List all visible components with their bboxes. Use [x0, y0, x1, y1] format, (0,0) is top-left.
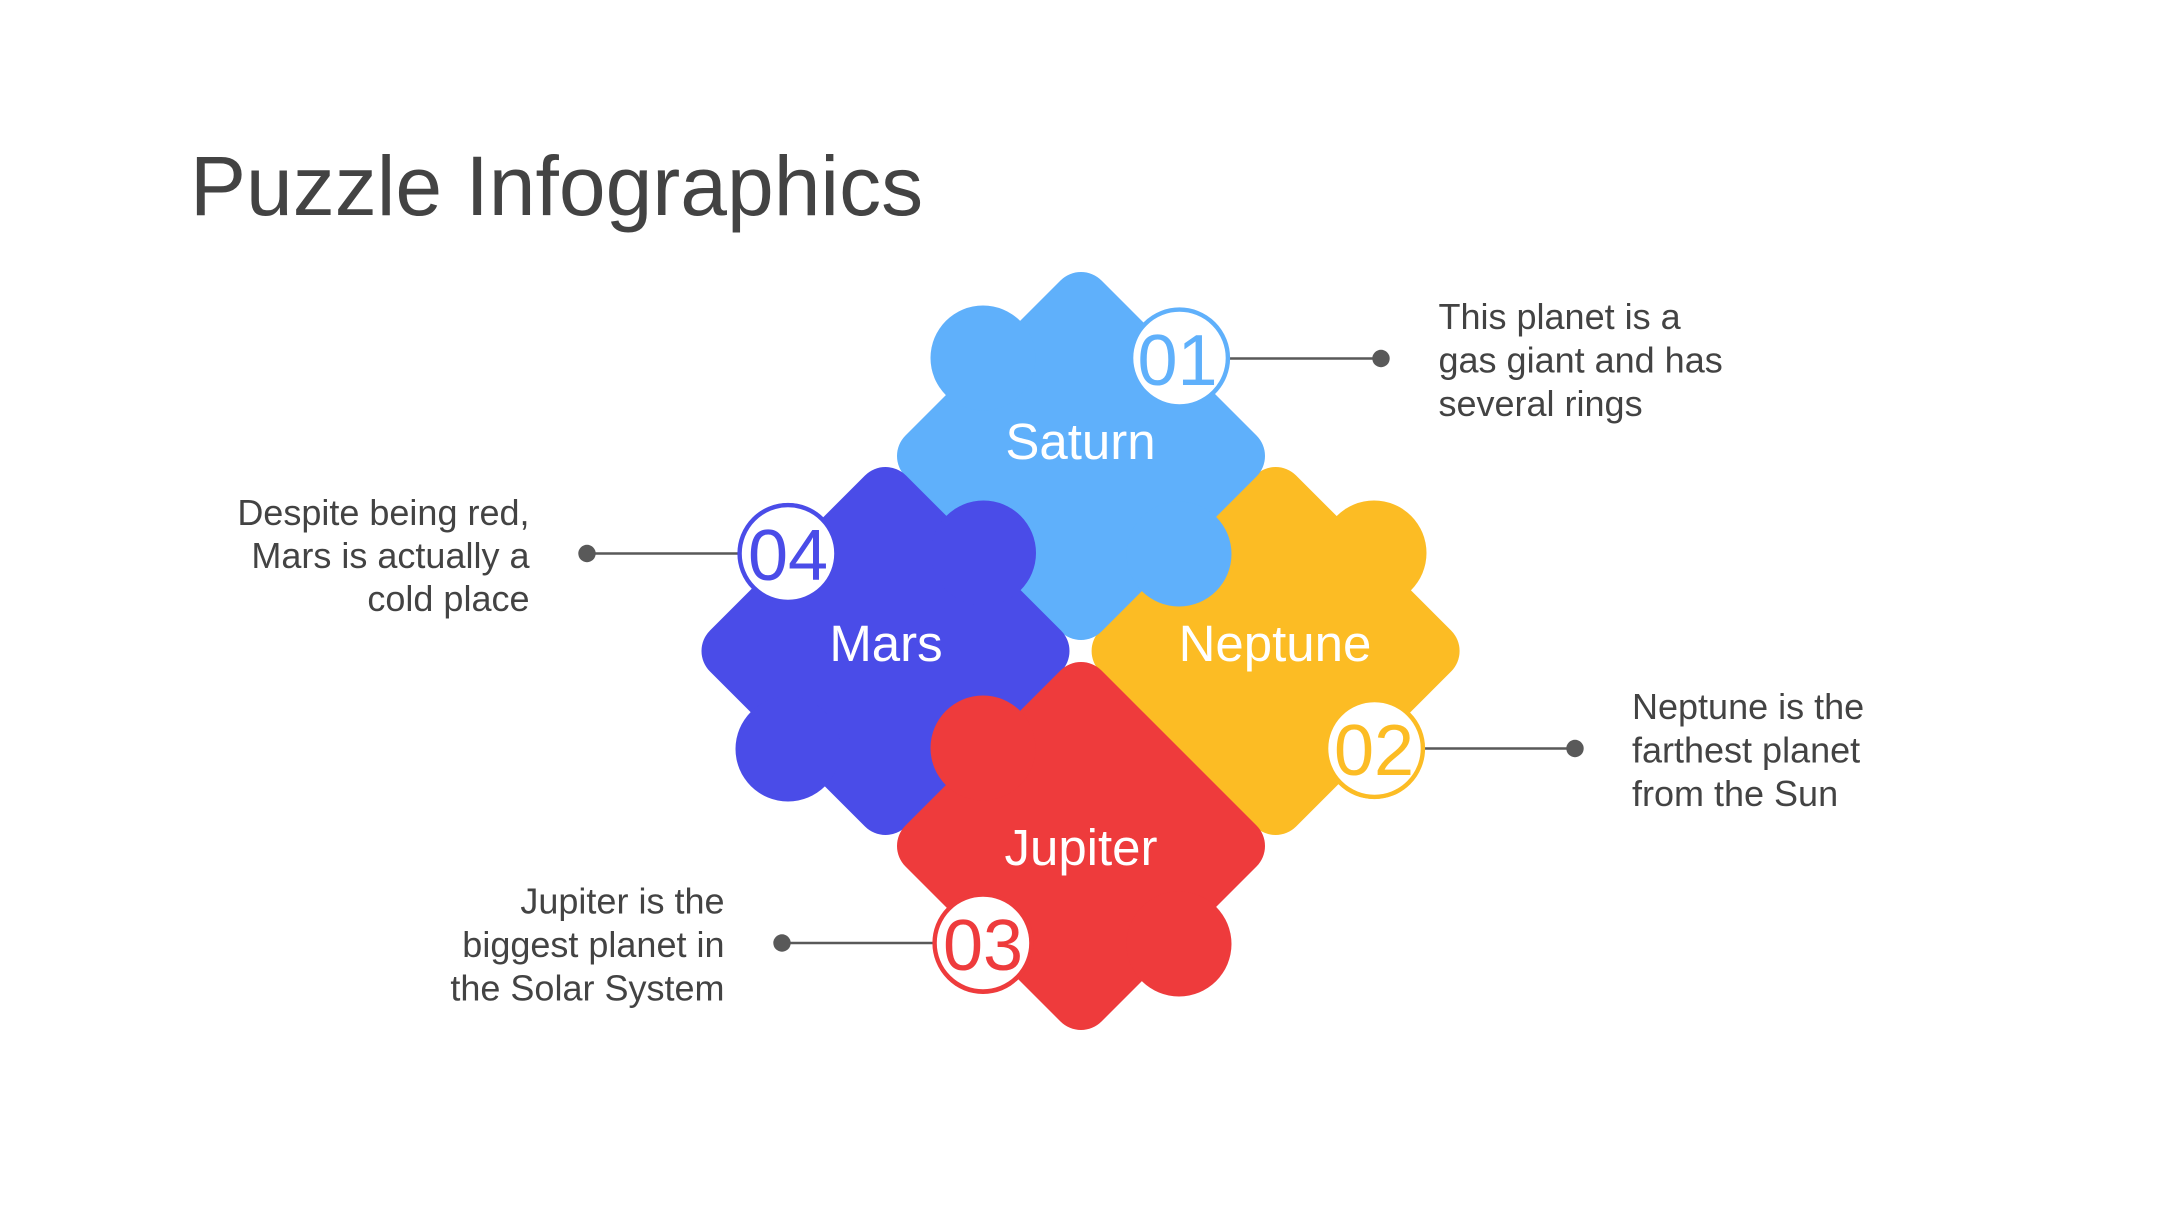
- text block: Mars description: Mars is actually a: [251, 535, 530, 576]
- label: Jupiter: Jupiter: [1004, 819, 1158, 876]
- badge: 03: 03: [943, 906, 1023, 986]
- puzzle piece: Mars: [689, 455, 1082, 847]
- label: Mars: Mars: [829, 615, 943, 672]
- callout connector: 02: [1420, 740, 1584, 757]
- text block: Mars description: Despite being red,: [237, 492, 530, 533]
- badge: 02: 02: [1334, 711, 1414, 791]
- text block: Neptune description: Neptune is the: [1632, 686, 1864, 727]
- callout connector: 01: [1226, 350, 1390, 367]
- label: Saturn: Saturn: [1005, 413, 1156, 470]
- text block: Saturn description: several rings: [1438, 383, 1643, 424]
- text block: Mars description: cold place: [367, 578, 530, 619]
- puzzle piece: Neptune: [1080, 455, 1472, 847]
- text block: Neptune description: from the Sun: [1632, 773, 1838, 814]
- badge: 04: [740, 505, 836, 602]
- puzzle piece: Jupiter: [885, 650, 1277, 1042]
- badge: 04: 04: [748, 516, 828, 596]
- puzzle piece: Saturn: [885, 260, 1277, 652]
- text block: Jupiter description: Jupiter is the: [520, 880, 724, 922]
- text block: Jupiter description: the Solar System: [450, 968, 724, 1008]
- callout connector: 04: [578, 545, 742, 562]
- label: Neptune: Neptune: [1179, 615, 1371, 672]
- text block: Saturn description: gas giant and has: [1438, 340, 1723, 380]
- badge: 03: [935, 895, 1031, 991]
- text block: Jupiter description: biggest planet in: [462, 924, 724, 965]
- badge: 01: 01: [1137, 321, 1218, 401]
- badge: 02: [1326, 700, 1423, 797]
- text block: Saturn description: This planet is a: [1438, 296, 1682, 337]
- callout connector: 03: [773, 934, 937, 952]
- badge: 01: [1131, 310, 1228, 406]
- title: Puzzle Infographics: [190, 139, 923, 233]
- text block: Neptune description: farthest planet: [1632, 730, 1860, 770]
